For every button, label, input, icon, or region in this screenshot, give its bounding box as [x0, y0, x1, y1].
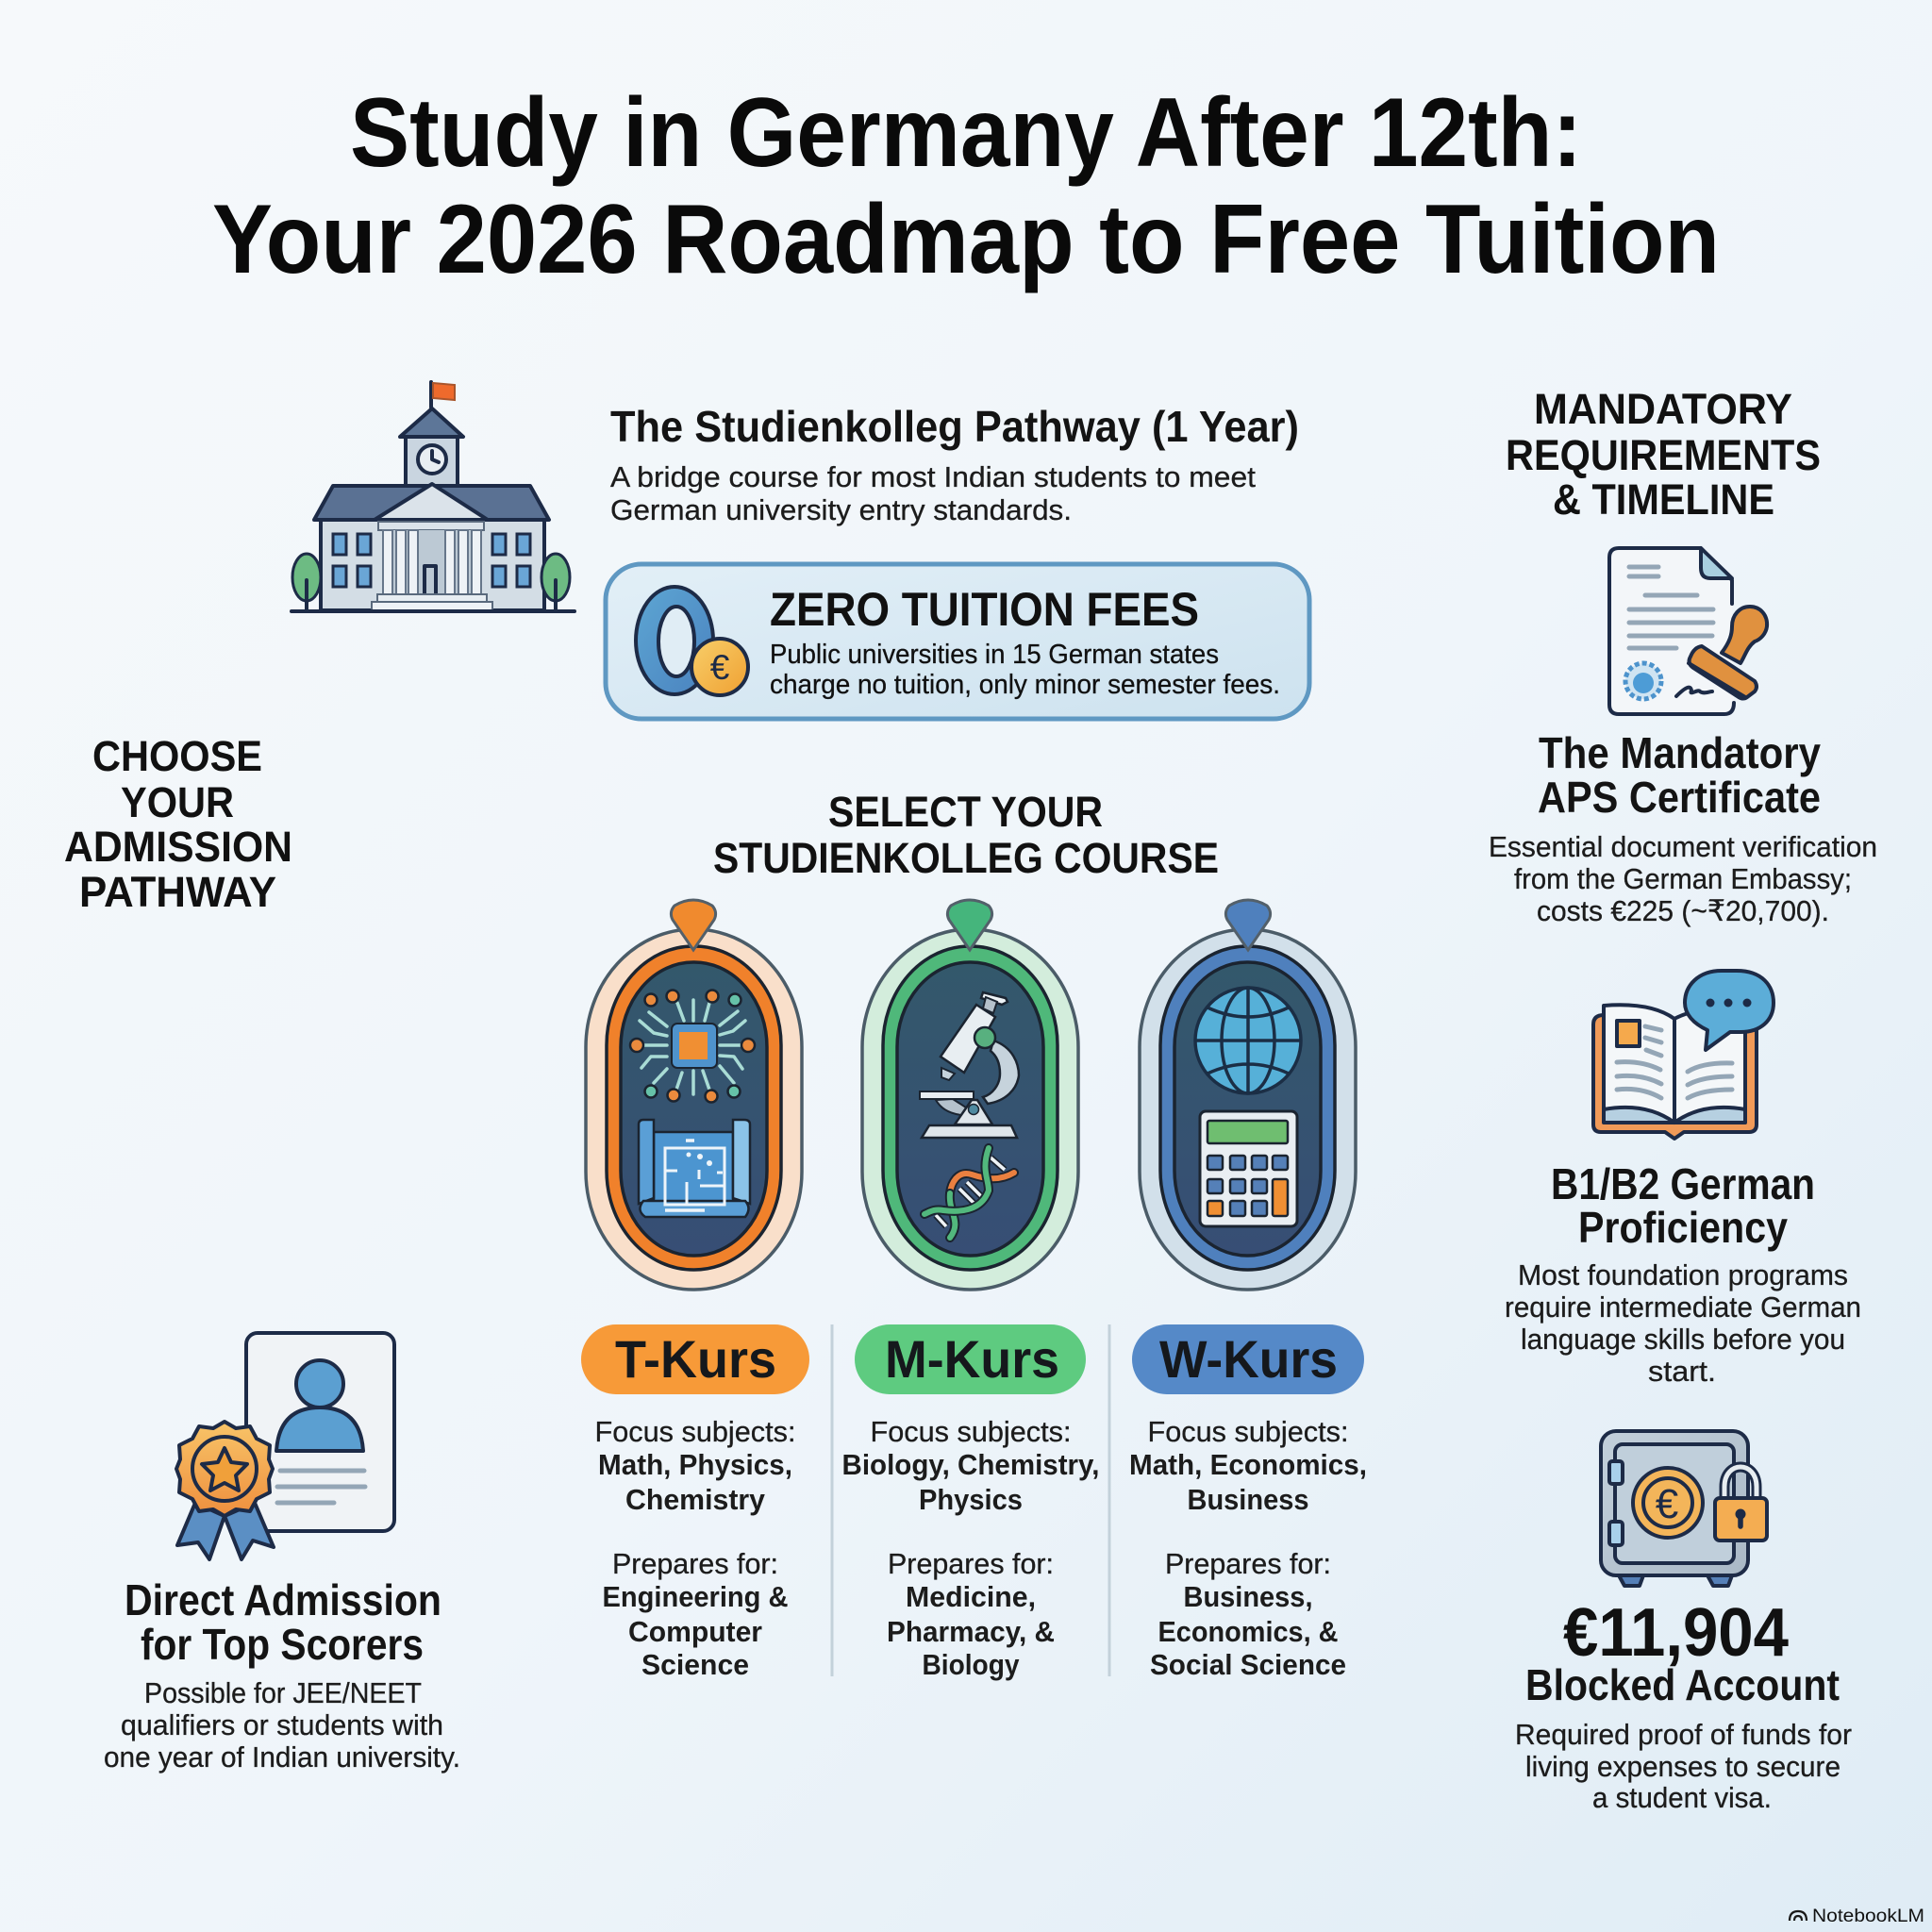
- badge: M-Kurs medicine: [862, 900, 1078, 1290]
- heading: choose your admission pathway: PATHWAY: [79, 868, 276, 916]
- text: M-Kurs details: Physics: [919, 1483, 1023, 1516]
- title: Your 2026 Roadmap to Free Tuition: [212, 185, 1720, 294]
- text: W-Kurs details: Math, Economics,: [1129, 1448, 1367, 1481]
- text: T-Kurs details: Engineering &: [602, 1580, 789, 1613]
- text: German proficiency: language skills before you: [1521, 1323, 1845, 1356]
- text: direct admission: one year of Indian university.: [104, 1740, 460, 1774]
- icon: DNA helix: [924, 1148, 1014, 1238]
- icon: university building: [291, 382, 575, 611]
- text: zero tuition description: charge no tuition, only minor semester fees.: [770, 670, 1280, 700]
- pill: M-Kurs: M-Kurs: [885, 1329, 1059, 1389]
- pill: W-Kurs: W-Kurs: [1159, 1329, 1338, 1389]
- text: German proficiency: B1/B2 German: [1551, 1159, 1815, 1208]
- text: German proficiency: require intermediate German: [1505, 1291, 1861, 1324]
- text: W-Kurs details: Focus subjects:: [1147, 1415, 1349, 1448]
- text: German proficiency: start.: [1648, 1355, 1716, 1388]
- text: blocked account: [1515, 1595, 1852, 1814]
- badge: T-Kurs engineering: [586, 900, 802, 1290]
- heading: select your Studienkolleg course: SELECT YOUR: [828, 788, 1103, 836]
- icon: microchip: [630, 991, 755, 1102]
- text: T-Kurs details: Focus subjects:: [594, 1415, 796, 1448]
- heading: mandatory requirements: [1506, 385, 1821, 524]
- text: APS certificate: costs €225 (~₹20,700).: [1537, 894, 1829, 927]
- icon: certificate with stamp: [1609, 548, 1767, 714]
- icon: blueprint: [639, 1120, 750, 1217]
- text: APS certificate: from the German Embassy;: [1514, 862, 1852, 895]
- text: pathway description: German university entry standards.: [610, 493, 1072, 526]
- text: M-Kurs details: Biology: [923, 1648, 1020, 1681]
- heading: mandatory requirements: MANDATORY: [1534, 385, 1792, 433]
- text: blocked account: Blocked Account: [1525, 1660, 1840, 1709]
- heading: choose your admission pathway: CHOOSE: [92, 732, 262, 780]
- heading: Studienkolleg pathway: The Studienkolleg Pathway (1 Year): [610, 402, 1299, 451]
- text: W-Kurs details: Prepares for:: [1165, 1547, 1331, 1580]
- text: W-Kurs details: [1129, 1415, 1367, 1681]
- text: zero tuition heading: ZERO TUITION FEES: [770, 583, 1199, 636]
- heading: choose your admission pathway: ADMISSION: [64, 823, 292, 871]
- text: German proficiency: [1505, 1159, 1861, 1388]
- text: pathway description: [610, 460, 1256, 526]
- text: M-Kurs details: Focus subjects:: [870, 1415, 1072, 1448]
- pill: T-Kurs: T-Kurs: [615, 1329, 776, 1389]
- heading: choose your admission pathway: YOUR: [121, 778, 234, 826]
- icon: ID card with award medal: [176, 1333, 394, 1559]
- text: W-Kurs details: Business: [1187, 1483, 1309, 1516]
- pill: M-Kurs: [855, 1324, 1086, 1394]
- pill: T-Kurs: [581, 1324, 809, 1394]
- watermark: NotebookLM: NotebookLM: [1812, 1907, 1924, 1926]
- text: T-Kurs details: Computer: [628, 1615, 762, 1648]
- text: direct admission: Possible for JEE/NEET: [144, 1676, 422, 1709]
- text: M-Kurs details: Pharmacy, &: [887, 1615, 1055, 1648]
- icon: zero and euro coin: [636, 587, 748, 695]
- text: pathway description: A bridge course for most Indian students to meet: [610, 460, 1256, 493]
- icon: safe with euro and padlock: [1601, 1431, 1767, 1586]
- text: direct admission: [104, 1575, 460, 1774]
- badge: W-Kurs business: [1140, 900, 1356, 1290]
- text: W-Kurs details: Economics, &: [1158, 1615, 1338, 1648]
- heading: mandatory requirements: & TIMELINE: [1553, 475, 1774, 524]
- title: [212, 78, 1720, 294]
- text: blocked account: Required proof of funds for: [1515, 1718, 1852, 1751]
- text: German proficiency: Proficiency: [1578, 1203, 1788, 1252]
- heading: select your Studienkolleg course: [713, 788, 1219, 882]
- text: T-Kurs details: Science: [641, 1648, 749, 1681]
- heading: mandatory requirements: REQUIREMENTS: [1506, 431, 1821, 479]
- text: M-Kurs details: Medicine,: [906, 1580, 1036, 1613]
- heading: choose your admission pathway: [64, 732, 292, 916]
- icon: microscope: [920, 992, 1019, 1138]
- text: blocked account: €11,904: [1563, 1595, 1789, 1671]
- text: T-Kurs details: [594, 1415, 796, 1681]
- icon: zero and euro coin: €: [710, 648, 730, 687]
- text: APS certificate: The Mandatory: [1539, 728, 1821, 777]
- icon: calculator: [1200, 1111, 1297, 1226]
- text: blocked account: a student visa.: [1592, 1781, 1772, 1814]
- text: M-Kurs details: [841, 1415, 1100, 1681]
- text: W-Kurs details: Business,: [1183, 1580, 1313, 1613]
- text: zero tuition description: [770, 640, 1280, 700]
- pill: W-Kurs: [1132, 1324, 1364, 1394]
- text: blocked account: living expenses to secure: [1525, 1750, 1840, 1783]
- text: direct admission: Direct Admission: [125, 1575, 441, 1624]
- text: T-Kurs details: Math, Physics,: [598, 1448, 792, 1481]
- text: T-Kurs details: Chemistry: [625, 1483, 766, 1516]
- text: APS certificate: APS Certificate: [1538, 773, 1821, 822]
- text: M-Kurs details: Prepares for:: [888, 1547, 1054, 1580]
- heading: select your Studienkolleg course: STUDIENKOLLEG COURSE: [713, 834, 1219, 882]
- icon: globe: [1195, 988, 1301, 1093]
- heading: Studienkolleg pathway: [610, 402, 1299, 526]
- icon: open book with speech bubble: [1593, 971, 1774, 1139]
- text: direct admission: for Top Scorers: [141, 1620, 424, 1669]
- text: M-Kurs details: Biology, Chemistry,: [841, 1448, 1100, 1481]
- text: zero tuition description: Public universities in 15 German states: [770, 640, 1219, 670]
- text: German proficiency: Most foundation programs: [1518, 1258, 1848, 1291]
- title: Study in Germany After 12th:: [350, 78, 1582, 188]
- text: T-Kurs details: Prepares for:: [612, 1547, 778, 1580]
- text: APS certificate: Essential document verification: [1489, 830, 1877, 863]
- text: APS certificate: [1489, 728, 1877, 927]
- icon: safe with euro and padlock: €: [1656, 1481, 1678, 1527]
- panel: zero tuition fees: [606, 564, 1309, 719]
- text: W-Kurs details: Social Science: [1150, 1648, 1346, 1681]
- text: direct admission: qualifiers or students with: [121, 1708, 443, 1741]
